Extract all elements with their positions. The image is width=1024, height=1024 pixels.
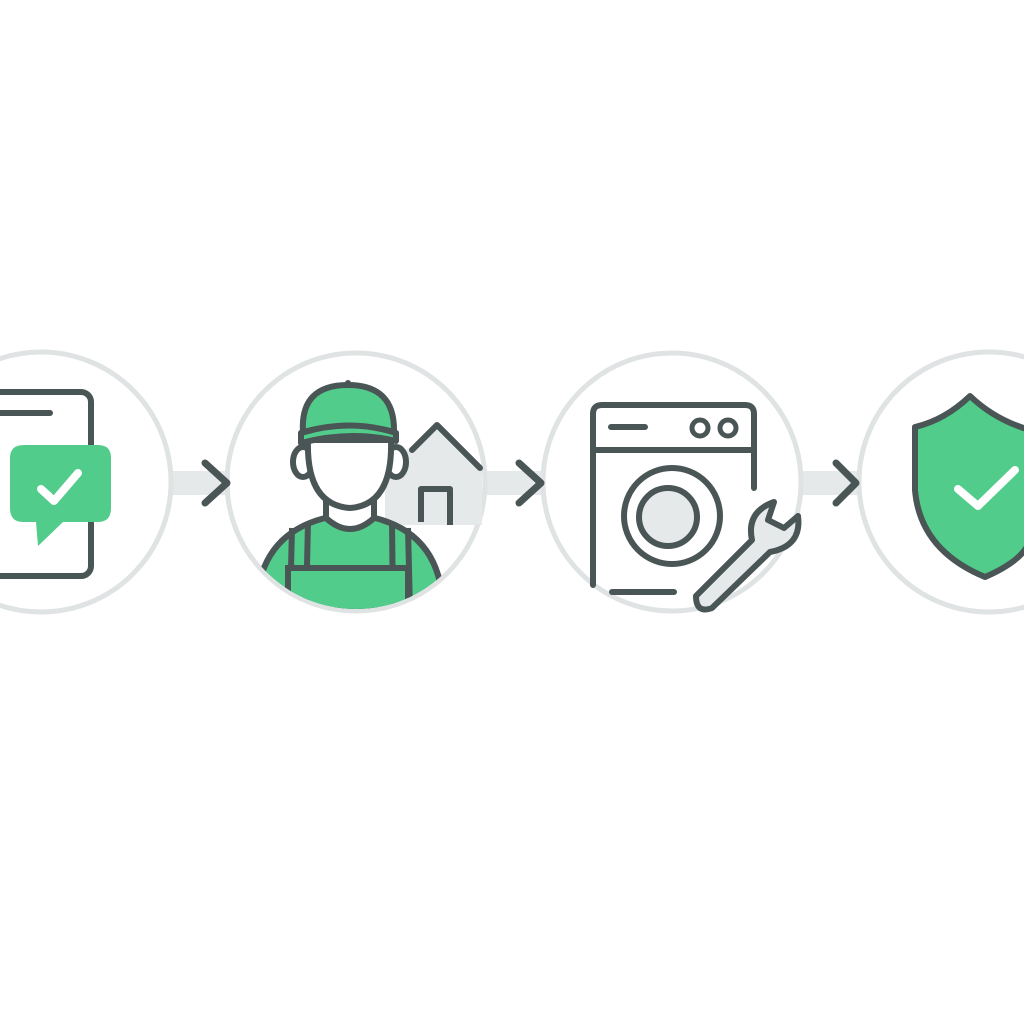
step 1: phone with message (0, 392, 111, 576)
step 2: technician and house (256, 380, 482, 618)
step 4: shield with check (915, 396, 1024, 577)
step 3: washing machine and wrench (593, 405, 798, 610)
circles (0, 352, 1024, 612)
connector bands (170, 471, 860, 495)
arrow chevrons (205, 463, 856, 503)
